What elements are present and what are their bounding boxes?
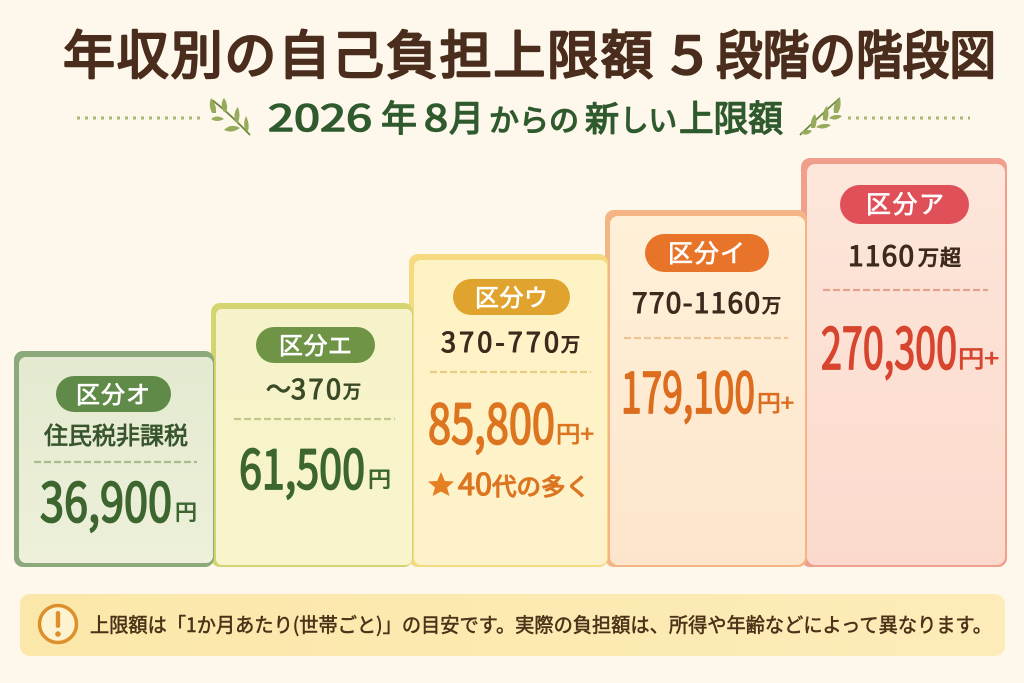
amount: 36,900円: 36,900 (40, 459, 172, 538)
income range: 1160万超: 1160 (848, 235, 914, 275)
icon: star (428, 472, 454, 496)
decorative dotted line: left (77, 116, 202, 120)
icon: right laurel sprig (800, 98, 842, 135)
amount: 179,100円+: 円+ (757, 384, 794, 418)
decorative dotted line: right (848, 116, 970, 120)
panel: 区分オ (14, 351, 214, 567)
badge: 区分エ: 区分エ (279, 326, 352, 361)
panel: 区分ア (801, 158, 1007, 567)
divider (234, 418, 395, 420)
income range: 770-1160万: 770-1160 (632, 282, 760, 322)
subtitle: からの (489, 96, 579, 140)
income range: 1160万超: 万超 (918, 242, 961, 272)
subtitle: しい (620, 96, 677, 140)
subtitle: 月 (449, 90, 484, 142)
amount: 270,300円+: 270,300 (821, 304, 957, 386)
title: 段階の階段図 (716, 14, 996, 89)
badge: 区分ウ (453, 278, 570, 315)
divider (624, 337, 788, 339)
amount: 61,500円: 61,500 (239, 426, 365, 505)
badge: 区分イ (645, 234, 769, 272)
divider (34, 461, 197, 463)
title (63, 14, 996, 89)
amount: 179,100円+: 179,100 (621, 349, 755, 430)
amount: 61,500円: 円 (368, 462, 391, 494)
icon: exclamation (40, 606, 76, 642)
badge: 区分イ: 区分イ (668, 234, 745, 270)
title: 5 (671, 14, 704, 89)
amount: 85,800円+: 85,800 (428, 380, 555, 460)
amount: 36,900円: 円 (175, 495, 197, 527)
badge: 区分ウ: 区分ウ (475, 278, 548, 313)
income range: ~370万: 370 (291, 368, 341, 407)
icon: left laurel sprig (210, 98, 250, 135)
amount: 85,800円+: 円+ (556, 415, 594, 449)
badge: 区分ア: 区分ア (866, 185, 944, 221)
income range: 住民税非課税: 住民税非課税 (44, 416, 188, 451)
income range: ~370万 (266, 368, 361, 407)
amount: 270,300円+: 円+ (958, 339, 999, 374)
badge: 区分オ (56, 375, 171, 412)
panel: 区分ウ (409, 254, 608, 567)
title: 年収別の自己負担上限額 (63, 14, 653, 89)
income range: 1160万超 (848, 235, 961, 275)
panel: 区分エ (211, 303, 413, 567)
divider (823, 289, 988, 291)
income range: 370-770万: 370-770 (441, 321, 559, 360)
income range: 770-1160万: 万 (762, 291, 781, 318)
divider (430, 371, 591, 373)
subtitle (268, 90, 783, 142)
subtitle: 年 (381, 90, 417, 142)
subtitle: 上限額 (679, 90, 783, 142)
subtitle: 2026 (268, 90, 372, 142)
badge: 区分ア (840, 185, 969, 224)
badge: 区分エ (256, 326, 375, 363)
income range: ~370万: ～ (266, 368, 291, 407)
subtitle: 8 (424, 90, 448, 142)
callout: note (20, 594, 1005, 656)
panel: 区分イ (605, 210, 807, 567)
badge: 区分オ: 区分オ (76, 375, 150, 410)
income range: ~370万: 万 (343, 378, 361, 404)
subtitle: 新 (585, 92, 619, 141)
income range: 370-770万: 万 (561, 330, 580, 357)
note: 40代の多く: 40代の多く (458, 460, 590, 504)
note text: 上限額は「1か月あたり(世帯ごと)」の目安です。実際の負担額は、所得や年齢などによって異なります。 (90, 609, 992, 638)
